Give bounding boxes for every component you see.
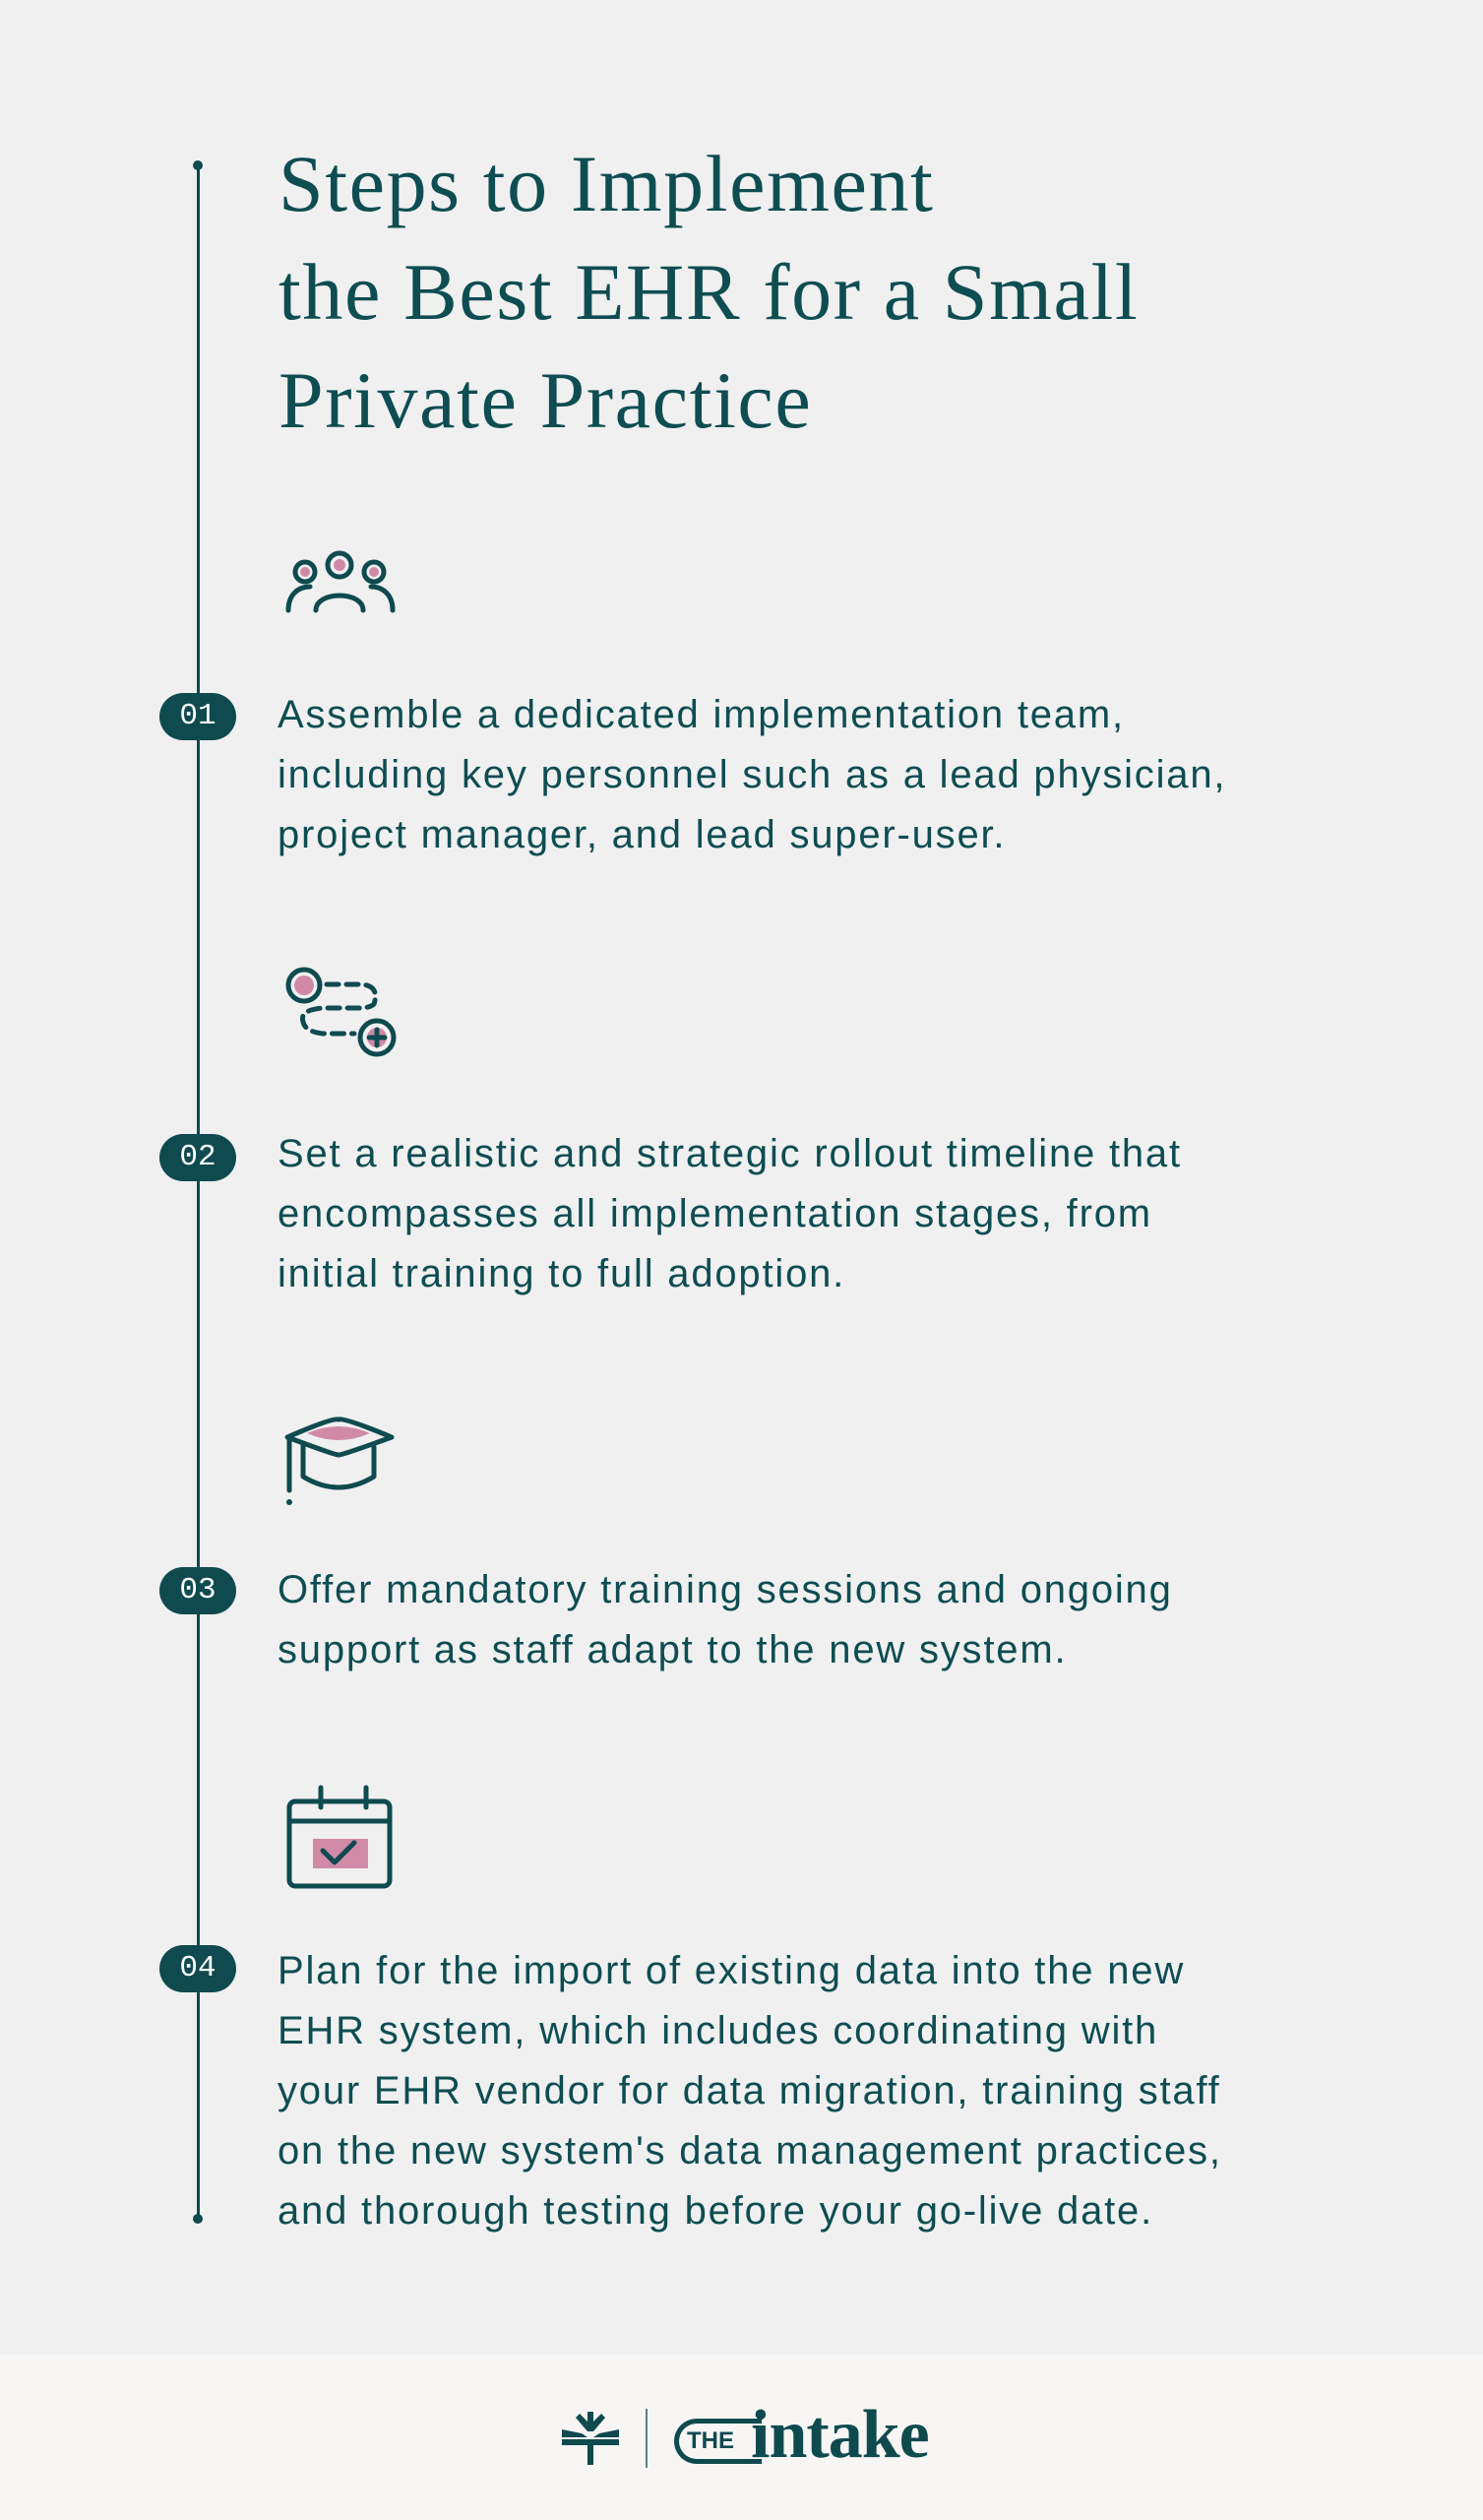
- step 4 text: your EHR vendor for data migration, training staff: [278, 2069, 1221, 2112]
- step 1 text: Assemble a dedicated implementation team,: [278, 693, 1125, 736]
- divider: [646, 2409, 648, 2468]
- step 2 text: initial training to full adoption.: [278, 1252, 845, 1295]
- step 3 text: [278, 1568, 1173, 1671]
- step 4 text: and thorough testing before your go-live date.: [278, 2189, 1153, 2233]
- badge 04: 04: [179, 1951, 216, 1985]
- logo: the intake: [674, 2397, 929, 2473]
- badge 01: [159, 693, 236, 740]
- icon: timeline route: [285, 967, 396, 1057]
- step 2 text: [278, 1132, 1182, 1295]
- timeline line: [197, 163, 200, 2221]
- step 1 text: project manager, and lead super-user.: [278, 813, 1006, 856]
- badge 01: 01: [179, 699, 216, 733]
- step 1 text: including key personnel such as a lead physician,: [278, 753, 1226, 796]
- timeline start dot: [193, 160, 203, 170]
- logo: tree mark: [562, 2412, 619, 2465]
- badge 02: [159, 1134, 236, 1181]
- step 4 text: on the new system's data management practices,: [278, 2129, 1222, 2173]
- title: the Best EHR for a Small: [278, 247, 1139, 337]
- badge 02: 02: [179, 1140, 216, 1174]
- timeline end dot: [193, 2214, 203, 2224]
- step 4 text: EHR system, which includes coordinating with: [278, 2009, 1158, 2052]
- step 3 text: Offer mandatory training sessions and ongoing: [278, 1568, 1173, 1611]
- icon: team: [285, 551, 396, 612]
- step 2 text: encompasses all implementation stages, from: [278, 1192, 1152, 1235]
- title: [278, 139, 1139, 445]
- step 1 text: [278, 693, 1226, 856]
- footer: [0, 2355, 1483, 2520]
- step 2 text: Set a realistic and strategic rollout timeline that: [278, 1132, 1182, 1175]
- icon: graduation cap: [285, 1417, 394, 1505]
- step 4 text: [278, 1949, 1222, 2233]
- title: Private Practice: [278, 355, 812, 445]
- logo: the intake: intake: [751, 2397, 929, 2473]
- badge 03: 03: [179, 1573, 216, 1607]
- title: Steps to Implement: [278, 139, 935, 228]
- badge 03: [159, 1567, 236, 1614]
- icon: calendar: [287, 1786, 392, 1888]
- logo: the intake: THE: [687, 2427, 734, 2454]
- step 4 text: Plan for the import of existing data into the new: [278, 1949, 1185, 1992]
- badge 04: [159, 1945, 236, 1992]
- step 3 text: support as staff adapt to the new system.: [278, 1628, 1067, 1671]
